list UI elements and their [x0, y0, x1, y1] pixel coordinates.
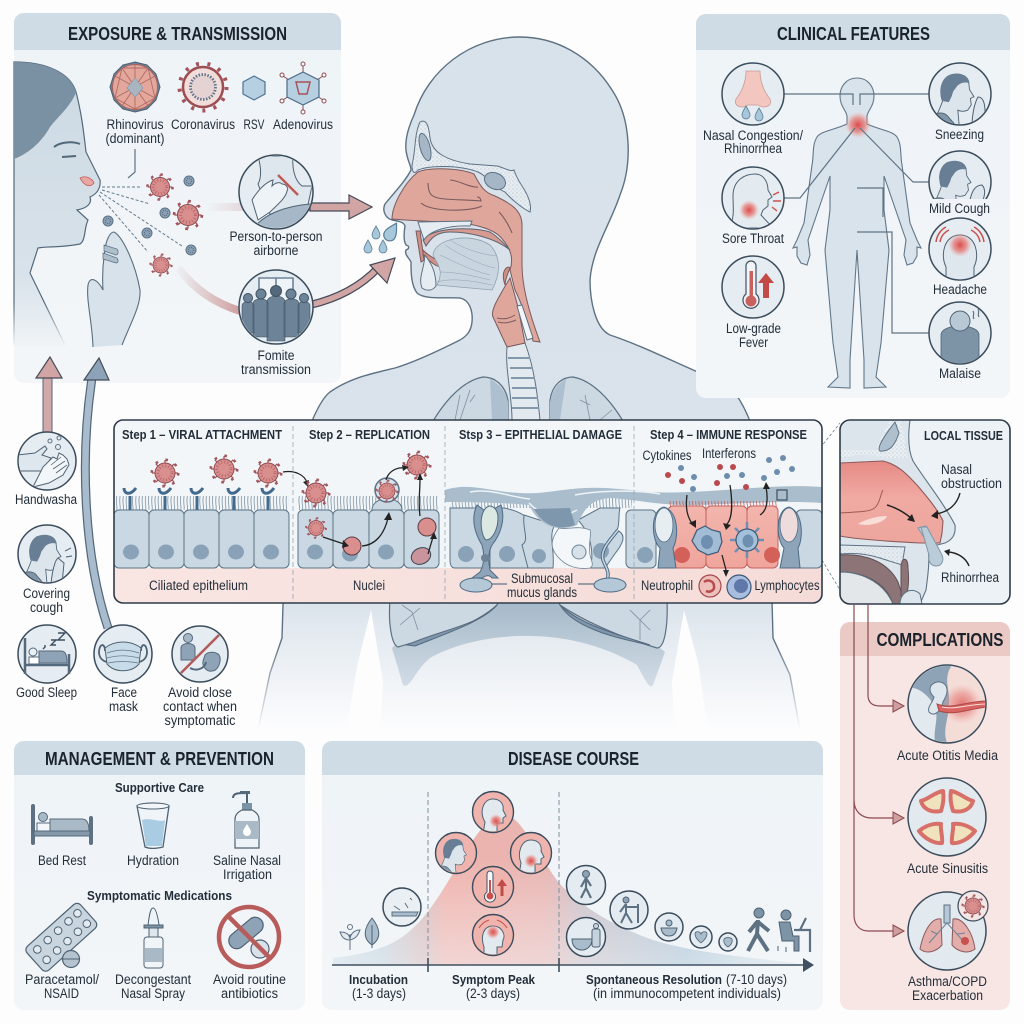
- label: acute sinusitis: Acute Sinusitis: [907, 861, 988, 876]
- heading: step 2: Step 2 – REPLICATION: [309, 427, 430, 442]
- panel: local tissue: [840, 420, 1010, 604]
- label: good sleep: Good Sleep: [16, 685, 77, 700]
- icon: peak cough: [435, 832, 476, 878]
- label: person-to-person: Person-to-person: [230, 229, 322, 244]
- icon: blister pack: [24, 901, 99, 973]
- lungs: [389, 377, 667, 686]
- label: saline irrigation: Irrigation: [223, 867, 272, 882]
- label: bed rest: Bed Rest: [38, 853, 86, 868]
- heading: step 4: Step 4 – IMMUNE RESPONSE: [650, 427, 807, 442]
- label: nasal obstruction: [941, 462, 1002, 491]
- icon: acute otitis media: [908, 665, 987, 743]
- label: saline irrigation: [213, 853, 281, 882]
- white gaps between arms and torso: [346, 610, 383, 730]
- time axis: [332, 958, 814, 972]
- heading: complications: COMPLICATIONS: [876, 630, 1004, 650]
- icon: face mask: [94, 625, 152, 683]
- phase label: resolution: [586, 972, 787, 1001]
- label: avoid close contact: [163, 685, 237, 728]
- virus labels: RSV: [244, 117, 264, 132]
- icon: peak head 1: [472, 792, 514, 834]
- label: nasal congestion: [703, 128, 803, 156]
- second gland: [594, 530, 626, 592]
- label: nasal congestion: Rhinorrhea: [724, 141, 782, 156]
- label: saline irrigation: Saline Nasal: [213, 853, 281, 868]
- virus labels: (dominant): [106, 131, 164, 146]
- dashed zoom leader lines: [786, 423, 840, 590]
- icon: neutrophil: [699, 575, 721, 597]
- icon: sneezing: [928, 63, 991, 130]
- icon: peak headache: [472, 914, 514, 957]
- phase label: resolution: (7-10 days): [726, 972, 787, 987]
- phase label: resolution: (in immunocompetent individuals): [593, 986, 781, 1001]
- label: sore throat: Sore Throat: [722, 231, 784, 246]
- labels: cytokines and interferons: [642, 446, 756, 463]
- arrow: defense blue: [84, 358, 109, 628]
- airborne droplet spread: [99, 149, 202, 276]
- heading: clinical features: CLINICAL FEATURES: [777, 24, 930, 44]
- icon: avoid close contact: [172, 626, 228, 682]
- heading: management: MANAGEMENT & PREVENTION: [45, 749, 274, 769]
- label: submucosal glands: Submucosal: [511, 571, 573, 586]
- label: nasal congestion: Nasal Congestion/: [703, 128, 803, 143]
- icon: fomite crowd: [239, 270, 313, 344]
- label: fomite: [241, 348, 311, 377]
- label: person-to-person: airborne: [254, 243, 298, 258]
- cough icon lower cut-off: [925, 199, 995, 216]
- label: covering cough: cough: [30, 600, 63, 615]
- mucus layer: [445, 486, 822, 528]
- label: rhinorrhea: Rhinorrhea: [941, 570, 999, 585]
- icon: avoid antibiotics: [219, 907, 279, 967]
- panel: complications: [840, 604, 1010, 1010]
- label: hydration: Hydration: [127, 853, 179, 868]
- symptom curve: [333, 815, 805, 965]
- phase label: incubation: (1-3 days): [352, 986, 406, 1001]
- subheading: symptomatic medications: Symptomatic Medications: [87, 888, 232, 903]
- icon: nasal spray: [144, 908, 163, 968]
- label: asthma copd: [908, 974, 987, 1003]
- label: nasal obstruction: Nasal: [941, 462, 972, 477]
- hand raised: [88, 232, 140, 347]
- label: fomite: transmission: [241, 362, 311, 377]
- heading: local tissue: LOCAL TISSUE: [924, 428, 1003, 443]
- heading: step 3: Stsp 3 – EPITHELIAL DAMAGE: [459, 427, 622, 442]
- heading: step 1: Step 1 – VIRAL ATTACHMENT: [122, 427, 282, 442]
- icon: acute sinusitis: [908, 778, 986, 856]
- label: submucosal glands: mucus glands: [507, 585, 577, 600]
- label: avoid antibiotics: antibiotics: [221, 986, 278, 1001]
- icon: handwash: [17, 432, 76, 490]
- goblet cell with gland: [460, 505, 503, 592]
- label: avoid close contact: symptomatic: [164, 713, 236, 728]
- icon: person at desk: [778, 910, 810, 952]
- label: avoid antibiotics: Avoid routine: [213, 972, 286, 987]
- subheading: supportive care: Supportive Care: [115, 780, 204, 795]
- icon: saline bottle: [233, 791, 259, 848]
- virus labels: Coronavirus: [171, 117, 235, 132]
- label: paracetamol: Paracetamol/: [25, 972, 99, 987]
- step dividers: [293, 426, 634, 603]
- icon: glass of water: [137, 803, 169, 848]
- recovery icons: [566, 866, 737, 956]
- icon: sore throat: [722, 167, 784, 229]
- step 2: replication: [298, 427, 439, 568]
- panel: clinical features: [696, 14, 1010, 398]
- icon: mild cough: [928, 150, 992, 199]
- icon: nasal congestion: [722, 63, 784, 125]
- label: fever: Fever: [739, 335, 768, 350]
- tongue: [433, 238, 498, 290]
- label: decongestant: [115, 972, 191, 1001]
- heading: exposure: EXPOSURE & TRANSMISSION: [68, 24, 287, 44]
- damaged cell: [552, 528, 592, 568]
- label: face mask: [109, 685, 138, 714]
- complication connectors: [854, 604, 904, 937]
- phase label: symptom peak: Symptom Peak: [452, 972, 536, 987]
- phase label: incubation: [349, 972, 408, 1001]
- label: lymphocytes: Lymphocytes: [754, 578, 820, 593]
- label: ciliated epithelium: Ciliated epithelium: [149, 578, 248, 593]
- label: avoid close contact: Avoid close: [168, 685, 232, 700]
- label: asthma copd: Asthma/COPD: [908, 974, 987, 989]
- label: otitis media: Acute Otitis Media: [897, 748, 998, 763]
- panel: exposure and transmission: [14, 13, 395, 383]
- label: avoid close contact: contact when: [163, 699, 237, 714]
- label: asthma copd: Exacerbation: [912, 988, 983, 1003]
- arrow: defense pink: [36, 357, 62, 432]
- label: sneezing: Sneezing: [935, 127, 984, 142]
- heading: disease course: DISEASE COURSE: [508, 749, 639, 769]
- icon: person-to-person airborne: [239, 155, 313, 232]
- label: avoid antibiotics: [213, 972, 286, 1001]
- icon: headache: [929, 218, 991, 280]
- panel: pathogenesis steps: [114, 420, 822, 603]
- label: paracetamol: [25, 972, 99, 1001]
- step 1: viral attachment: [114, 427, 309, 568]
- label: covering cough: Covering: [23, 586, 70, 601]
- phase label: symptom peak: (2-3 days): [466, 986, 520, 1001]
- label: fever: Low-grade: [726, 321, 781, 336]
- label: mild cough: Mild Cough: [929, 201, 990, 216]
- step 4: immune response: [626, 427, 822, 599]
- label: neutrophil: Neutrophil: [641, 578, 693, 593]
- label: decongestant: Decongestant: [115, 972, 191, 987]
- virus labels: Adenovirus: [273, 117, 333, 132]
- cytokine and interferon dots: [665, 455, 795, 492]
- label: paracetamol: NSAID: [44, 986, 79, 1001]
- trachea: [507, 343, 540, 420]
- label: face mask: mask: [109, 699, 138, 714]
- label: headache: Headache: [933, 282, 987, 297]
- local nasal anatomy: [840, 420, 969, 604]
- label: fomite: Fomite: [258, 348, 294, 363]
- bone and sinuses: [412, 121, 531, 212]
- virus: RSV: [243, 76, 265, 100]
- icon: peak throat: [510, 832, 552, 875]
- nasal cavity and pharynx: [392, 169, 540, 347]
- icon: lymphocyte: [727, 575, 751, 599]
- body figure: [793, 78, 921, 388]
- icon: walking person: [748, 908, 769, 951]
- label: handwash: Handwasha: [15, 492, 77, 507]
- step 3: epithelial damage: [445, 427, 822, 592]
- phase label: symptom peak: [452, 972, 536, 1001]
- arrow: fomite: [178, 258, 395, 311]
- label: person-to-person: [230, 229, 322, 258]
- virus: coronavirus: [180, 64, 226, 110]
- virus labels: [106, 117, 333, 146]
- icon: low-grade fever: [722, 256, 784, 318]
- arrow: person to person: [208, 195, 372, 219]
- labels: cytokines and interferons: Interferons: [702, 446, 756, 461]
- panel: disease course: [322, 741, 823, 1010]
- virus labels: Rhinovirus: [106, 117, 164, 132]
- throat inflammation: [845, 112, 871, 138]
- label: nasal obstruction: obstruction: [941, 476, 1002, 491]
- droplets: [364, 220, 402, 253]
- phase label: incubation: Incubation: [349, 972, 408, 987]
- virus: rhinovirus: [110, 62, 160, 112]
- panel: management and prevention: [14, 741, 305, 1010]
- central anatomical figure: [258, 37, 800, 730]
- icon: bed: [33, 806, 91, 843]
- icon: covering cough: [18, 525, 76, 588]
- labels: cytokines and interferons: Cytokines: [642, 448, 692, 463]
- label: submucosal glands: [507, 571, 577, 600]
- icon: malaise: [929, 302, 991, 364]
- label: face mask: Face: [111, 685, 137, 700]
- phase dividers: [428, 792, 559, 956]
- symptom peak icons: [435, 792, 552, 957]
- label: covering cough: [23, 586, 70, 615]
- face profile: [14, 62, 100, 345]
- virus: adenovirus: [280, 62, 326, 114]
- incubation icons: [340, 888, 421, 950]
- label: decongestant: Nasal Spray: [121, 986, 185, 1001]
- label: malaise: Malaise: [939, 366, 981, 381]
- label: nuclei: Nuclei: [353, 578, 385, 593]
- phase label: resolution: Spontaneous Resolution: [586, 972, 722, 987]
- icon: good sleep: [18, 625, 76, 683]
- label: fever: [726, 321, 781, 350]
- feature connector lines: [784, 94, 929, 333]
- icon: asthma copd: [908, 891, 988, 970]
- icon: peak fever: [472, 866, 514, 908]
